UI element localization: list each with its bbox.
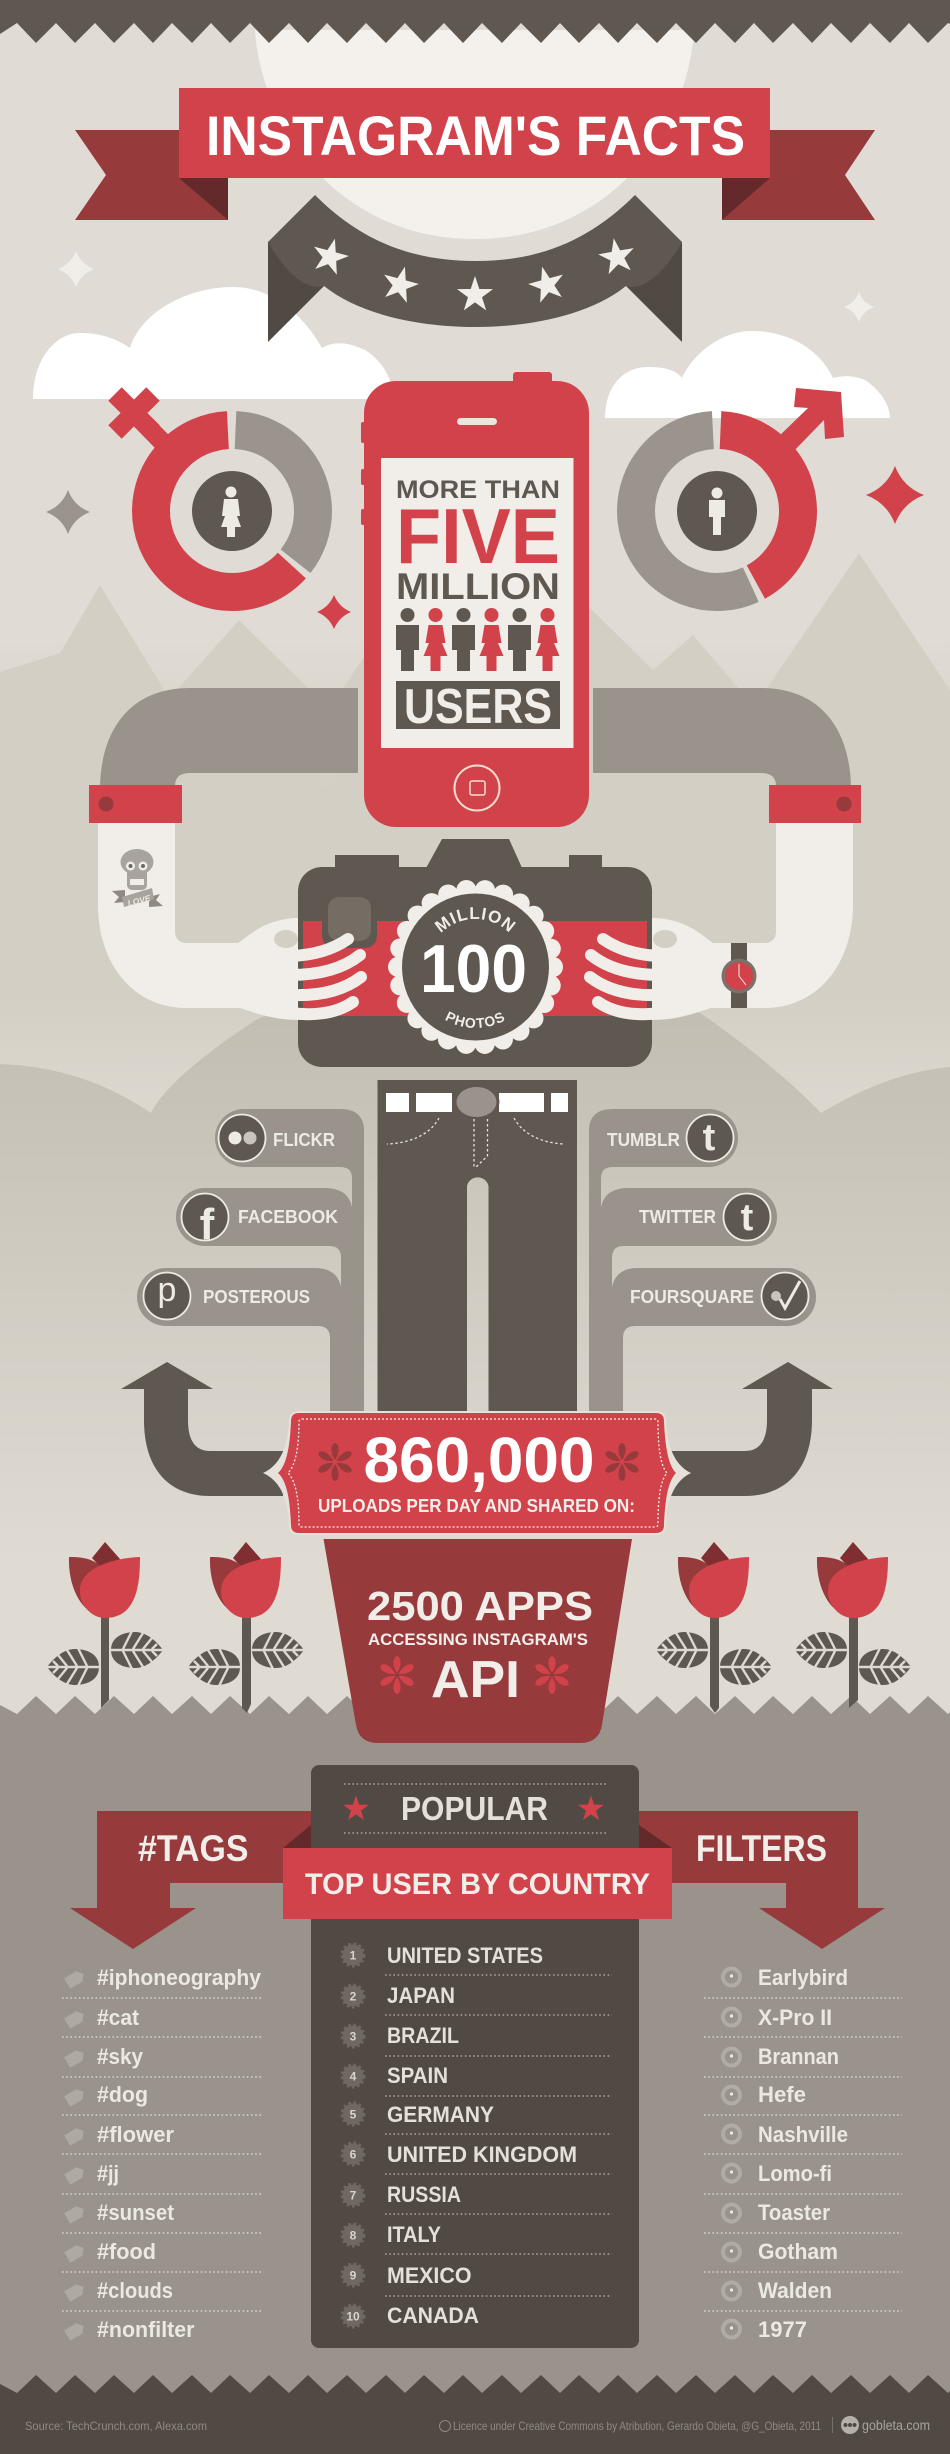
tag names: #food bbox=[97, 2239, 156, 2264]
filter names: Nashville bbox=[758, 2122, 848, 2147]
female symbol cross bbox=[115, 394, 178, 458]
star banner bbox=[268, 195, 682, 342]
asterisks bbox=[317, 1443, 640, 1481]
panel: popular / countries bbox=[283, 1765, 672, 2348]
facebook bbox=[182, 1194, 339, 1249]
list: filters bbox=[704, 1965, 902, 2342]
tag names: #jj bbox=[97, 2161, 119, 2186]
footer: gobleta logo: gobleta.com bbox=[862, 2417, 930, 2433]
phone bbox=[361, 372, 589, 827]
background mountains bbox=[0, 553, 950, 792]
photos badge bbox=[388, 880, 563, 1054]
footer: licence: Licence under Creative Commons by Atribution, Gerardo Obieta, @G_Obieta, 2011 bbox=[453, 2419, 821, 2433]
arrow ribbon: tags bbox=[70, 1811, 320, 1949]
tag names: #flower bbox=[97, 2122, 174, 2147]
icon: skull tattoo: LOVE bbox=[127, 893, 152, 908]
footer: gobleta logo bbox=[841, 2416, 930, 2434]
flickr: FLICKR bbox=[273, 1129, 335, 1150]
facebook: FACEBOOK bbox=[238, 1206, 339, 1227]
twitter: TWITTER bbox=[639, 1206, 716, 1227]
tumblr: t bbox=[703, 1117, 716, 1159]
panel: popular / countries: TOP USER BY COUNTRY bbox=[305, 1868, 650, 1901]
uploads caption: UPLOADS PER DAY AND SHARED ON: bbox=[318, 1496, 635, 1516]
flower pot: apps: API bbox=[431, 1651, 520, 1709]
background hills bbox=[0, 1000, 950, 1720]
rank badges bbox=[342, 1944, 364, 2327]
tag names: #iphoneography bbox=[97, 1965, 262, 1990]
popular heading: POPULAR bbox=[401, 1790, 548, 1827]
thumb gaps bbox=[274, 930, 677, 948]
rank numbers: 9 bbox=[350, 2268, 357, 2282]
country names bbox=[387, 1943, 577, 2328]
tag names: #sunset bbox=[97, 2200, 175, 2225]
country names: ITALY bbox=[387, 2222, 441, 2247]
flower pot: apps: ACCESSING INSTAGRAM'S bbox=[368, 1630, 588, 1649]
foursquare: FOURSQUARE bbox=[630, 1286, 754, 1307]
photos badge: 100 bbox=[420, 931, 527, 1007]
filter names: Brannan bbox=[758, 2044, 839, 2069]
country names: CANADA bbox=[387, 2303, 479, 2328]
tag names: #nonfilter bbox=[97, 2317, 195, 2342]
rank numbers: 7 bbox=[350, 2188, 357, 2202]
arrow ribbon: tags: #TAGS bbox=[138, 1828, 248, 1869]
twitter: t bbox=[741, 1197, 754, 1239]
uploads number: 860,000 bbox=[364, 1424, 594, 1496]
rank numbers: 2 bbox=[350, 1990, 357, 2004]
background sky bbox=[0, 0, 950, 1740]
tag names bbox=[97, 1965, 262, 2342]
country names: UNITED STATES bbox=[387, 1943, 543, 1968]
rank numbers: 8 bbox=[350, 2228, 357, 2242]
list: tags bbox=[62, 1965, 262, 2342]
country names: RUSSIA bbox=[387, 2182, 461, 2207]
arms: gray sleeves bbox=[100, 688, 851, 790]
title: INSTAGRAM'S FACTS bbox=[206, 104, 745, 167]
ribbon folds bbox=[283, 1825, 311, 1848]
filter names bbox=[758, 1965, 848, 2342]
lens icons bbox=[721, 1966, 742, 2340]
sparkles: gray and red bbox=[46, 466, 924, 629]
icon: man bbox=[709, 488, 725, 535]
phone: MILLION bbox=[396, 566, 560, 607]
top zigzag band bbox=[0, 0, 950, 43]
flower pot: apps: 2500 APPS bbox=[367, 1583, 593, 1629]
arrow right bbox=[671, 1362, 833, 1496]
social branches left bbox=[137, 1109, 364, 1415]
country dividers bbox=[385, 1975, 612, 2296]
arrow left bbox=[121, 1362, 283, 1496]
male symbol arrow bbox=[775, 388, 844, 455]
flower pot: apps bbox=[324, 1539, 632, 1743]
footer band bbox=[0, 2375, 950, 2454]
tag icons bbox=[64, 1969, 87, 2341]
stars bbox=[309, 234, 637, 310]
cuffs bbox=[89, 785, 861, 823]
tag names: #clouds bbox=[97, 2278, 173, 2303]
rank numbers: 4 bbox=[350, 2070, 357, 2084]
rank numbers: 3 bbox=[350, 2030, 357, 2044]
uploads badge bbox=[263, 1411, 691, 1535]
country names: MEXICO bbox=[387, 2263, 472, 2288]
facebook: f bbox=[200, 1200, 215, 1249]
pants bbox=[378, 1080, 577, 1415]
filter names: Walden bbox=[758, 2278, 832, 2303]
footer: source: Source: TechCrunch.com, Alexa.com bbox=[25, 2419, 207, 2433]
flickr bbox=[218, 1114, 335, 1162]
country names: UNITED KINGDOM bbox=[387, 2142, 577, 2167]
users label bbox=[396, 681, 560, 729]
belt bbox=[386, 1093, 568, 1112]
twitter bbox=[639, 1194, 770, 1240]
tumblr: TUMBLR bbox=[607, 1129, 680, 1150]
rank numbers: 6 bbox=[350, 2148, 357, 2162]
arrow ribbon: filters: FILTERS bbox=[696, 1828, 827, 1869]
tulips bbox=[46, 1542, 912, 1713]
arms: white forearms and hands bbox=[98, 820, 853, 1020]
icon: skull tattoo bbox=[112, 849, 163, 908]
tag names: #dog bbox=[97, 2082, 148, 2107]
icon: wrist watch bbox=[722, 943, 756, 1008]
filter names: Hefe bbox=[758, 2082, 806, 2107]
posterous: p bbox=[158, 1271, 176, 1309]
stars red bbox=[343, 1795, 604, 1820]
rank numbers bbox=[346, 1948, 360, 2324]
sparkles: light bbox=[58, 251, 874, 322]
fingers bbox=[290, 939, 661, 1014]
tag names: #sky bbox=[97, 2044, 144, 2069]
tag names: #cat bbox=[97, 2005, 140, 2030]
filter names: Lomo-fi bbox=[758, 2161, 832, 2186]
people row bbox=[396, 608, 560, 671]
stitching bbox=[387, 1118, 564, 1168]
filter names: X-Pro II bbox=[758, 2005, 832, 2030]
filter names: Toaster bbox=[758, 2200, 830, 2225]
icon: woman bbox=[221, 486, 241, 537]
country names: GERMANY bbox=[387, 2102, 494, 2127]
filter names: Gotham bbox=[758, 2239, 838, 2264]
female donut chart bbox=[115, 394, 313, 592]
tumblr bbox=[607, 1114, 734, 1162]
male donut chart bbox=[636, 388, 844, 592]
clouds bbox=[33, 287, 890, 418]
filter names: Earlybird bbox=[758, 1965, 848, 1990]
top user ribbon bbox=[283, 1848, 672, 1919]
title ribbon bbox=[75, 88, 875, 220]
filter names: 1977 bbox=[758, 2317, 807, 2342]
rank numbers: 10 bbox=[346, 2310, 360, 2324]
posterous: POSTEROUS bbox=[203, 1286, 310, 1307]
photos badge: MILLION bbox=[434, 907, 516, 932]
phone: USERS bbox=[404, 680, 552, 734]
home button bbox=[454, 766, 500, 810]
phone text: MORE THAN bbox=[396, 476, 560, 504]
country names: SPAIN bbox=[387, 2063, 448, 2088]
social branches right bbox=[589, 1109, 816, 1415]
phone: FIVE bbox=[396, 492, 560, 580]
posterous bbox=[144, 1271, 310, 1320]
camera bbox=[298, 839, 652, 1067]
rank numbers: 1 bbox=[350, 1948, 357, 1962]
ground bbox=[0, 1696, 950, 2454]
rank numbers: 5 bbox=[350, 2108, 357, 2122]
foursquare bbox=[630, 1272, 808, 1320]
belt buckle bbox=[454, 1086, 500, 1118]
photos badge: PHOTOS bbox=[445, 1011, 504, 1028]
sun bbox=[255, 30, 694, 239]
arrow ribbon: filters bbox=[630, 1811, 885, 1949]
country names: JAPAN bbox=[387, 1983, 455, 2008]
country names: BRAZIL bbox=[387, 2023, 459, 2048]
